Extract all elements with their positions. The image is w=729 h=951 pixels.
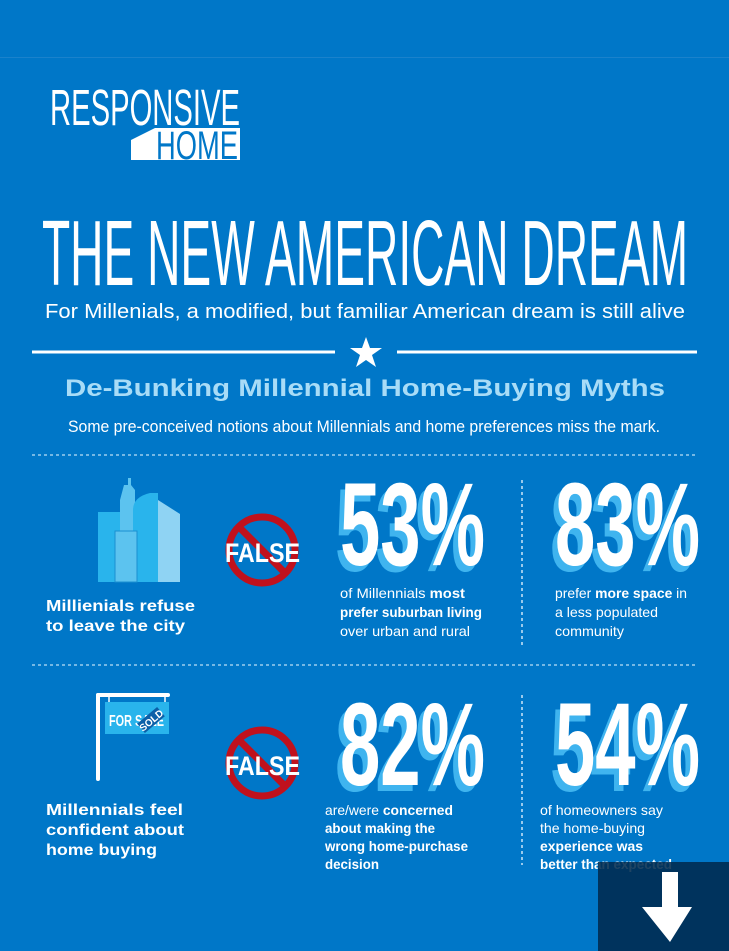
stat 53%: prefer suburban living — [340, 604, 482, 620]
icon: for sale sign — [96, 693, 170, 781]
section subheading: Some pre-conceived notions about Millennials and home preferences miss the mark. — [68, 417, 660, 436]
myth text: to leave the city — [46, 618, 185, 635]
myth text: home buying — [46, 842, 157, 859]
stat 54% — [540, 679, 700, 872]
stat 82%: are/were concerned — [325, 802, 454, 818]
logo: Responsive Home — [50, 79, 240, 168]
stat 83%: prefer more space in — [555, 585, 687, 601]
section heading: De-Bunking Millennial Home-Buying Myths — [65, 375, 665, 402]
icon: FALSE 2: FALSE — [225, 751, 300, 781]
subtitle: For Millenials, a modified, but familiar American dream is still alive — [45, 301, 685, 323]
stat 53%: 53% — [335, 465, 480, 597]
logo: Responsive Home: HOME — [156, 124, 238, 168]
row 1: city myth — [46, 478, 195, 635]
stat 54%: better than expected — [540, 856, 672, 872]
icon: for sale sign: SOLD — [138, 708, 166, 734]
stat 53%: of Millennials most — [340, 585, 463, 601]
stat 83%: community — [555, 623, 624, 639]
stat 82%: wrong home-purchase — [324, 838, 468, 854]
stat 54%: experience was — [540, 838, 643, 854]
stat 82%: 82% — [340, 679, 485, 811]
stat 82% — [324, 679, 485, 872]
stat 83%: a less populated — [555, 604, 658, 620]
stat 83% — [550, 459, 700, 639]
scroll-down arrow button — [598, 862, 729, 951]
icon: FALSE 2 — [225, 730, 300, 796]
stat 53% — [335, 459, 485, 639]
stat 82%: 82% — [335, 685, 480, 817]
icon: FALSE 1 — [225, 517, 300, 583]
myth text: Millienials refuse — [46, 598, 195, 615]
stat 53%: over urban and rural — [340, 623, 470, 639]
myth text: confident about — [46, 822, 185, 839]
icon: for sale sign: FOR SALE — [109, 713, 164, 730]
icon: city — [98, 478, 180, 582]
icon: FALSE 1: FALSE — [225, 538, 300, 568]
stat 53%: 53% — [340, 459, 485, 591]
stat 54%: of homeowners say — [540, 802, 663, 818]
myth text: Millennials feel — [46, 802, 183, 819]
row 2: buying myth — [46, 693, 185, 859]
stat 54%: the home-buying — [540, 820, 645, 836]
stat 82%: about making the — [325, 820, 435, 836]
stat 82%: decision — [325, 856, 379, 872]
logo: Responsive Home: RESPONSIVE — [50, 79, 240, 136]
divider with star — [32, 337, 697, 367]
